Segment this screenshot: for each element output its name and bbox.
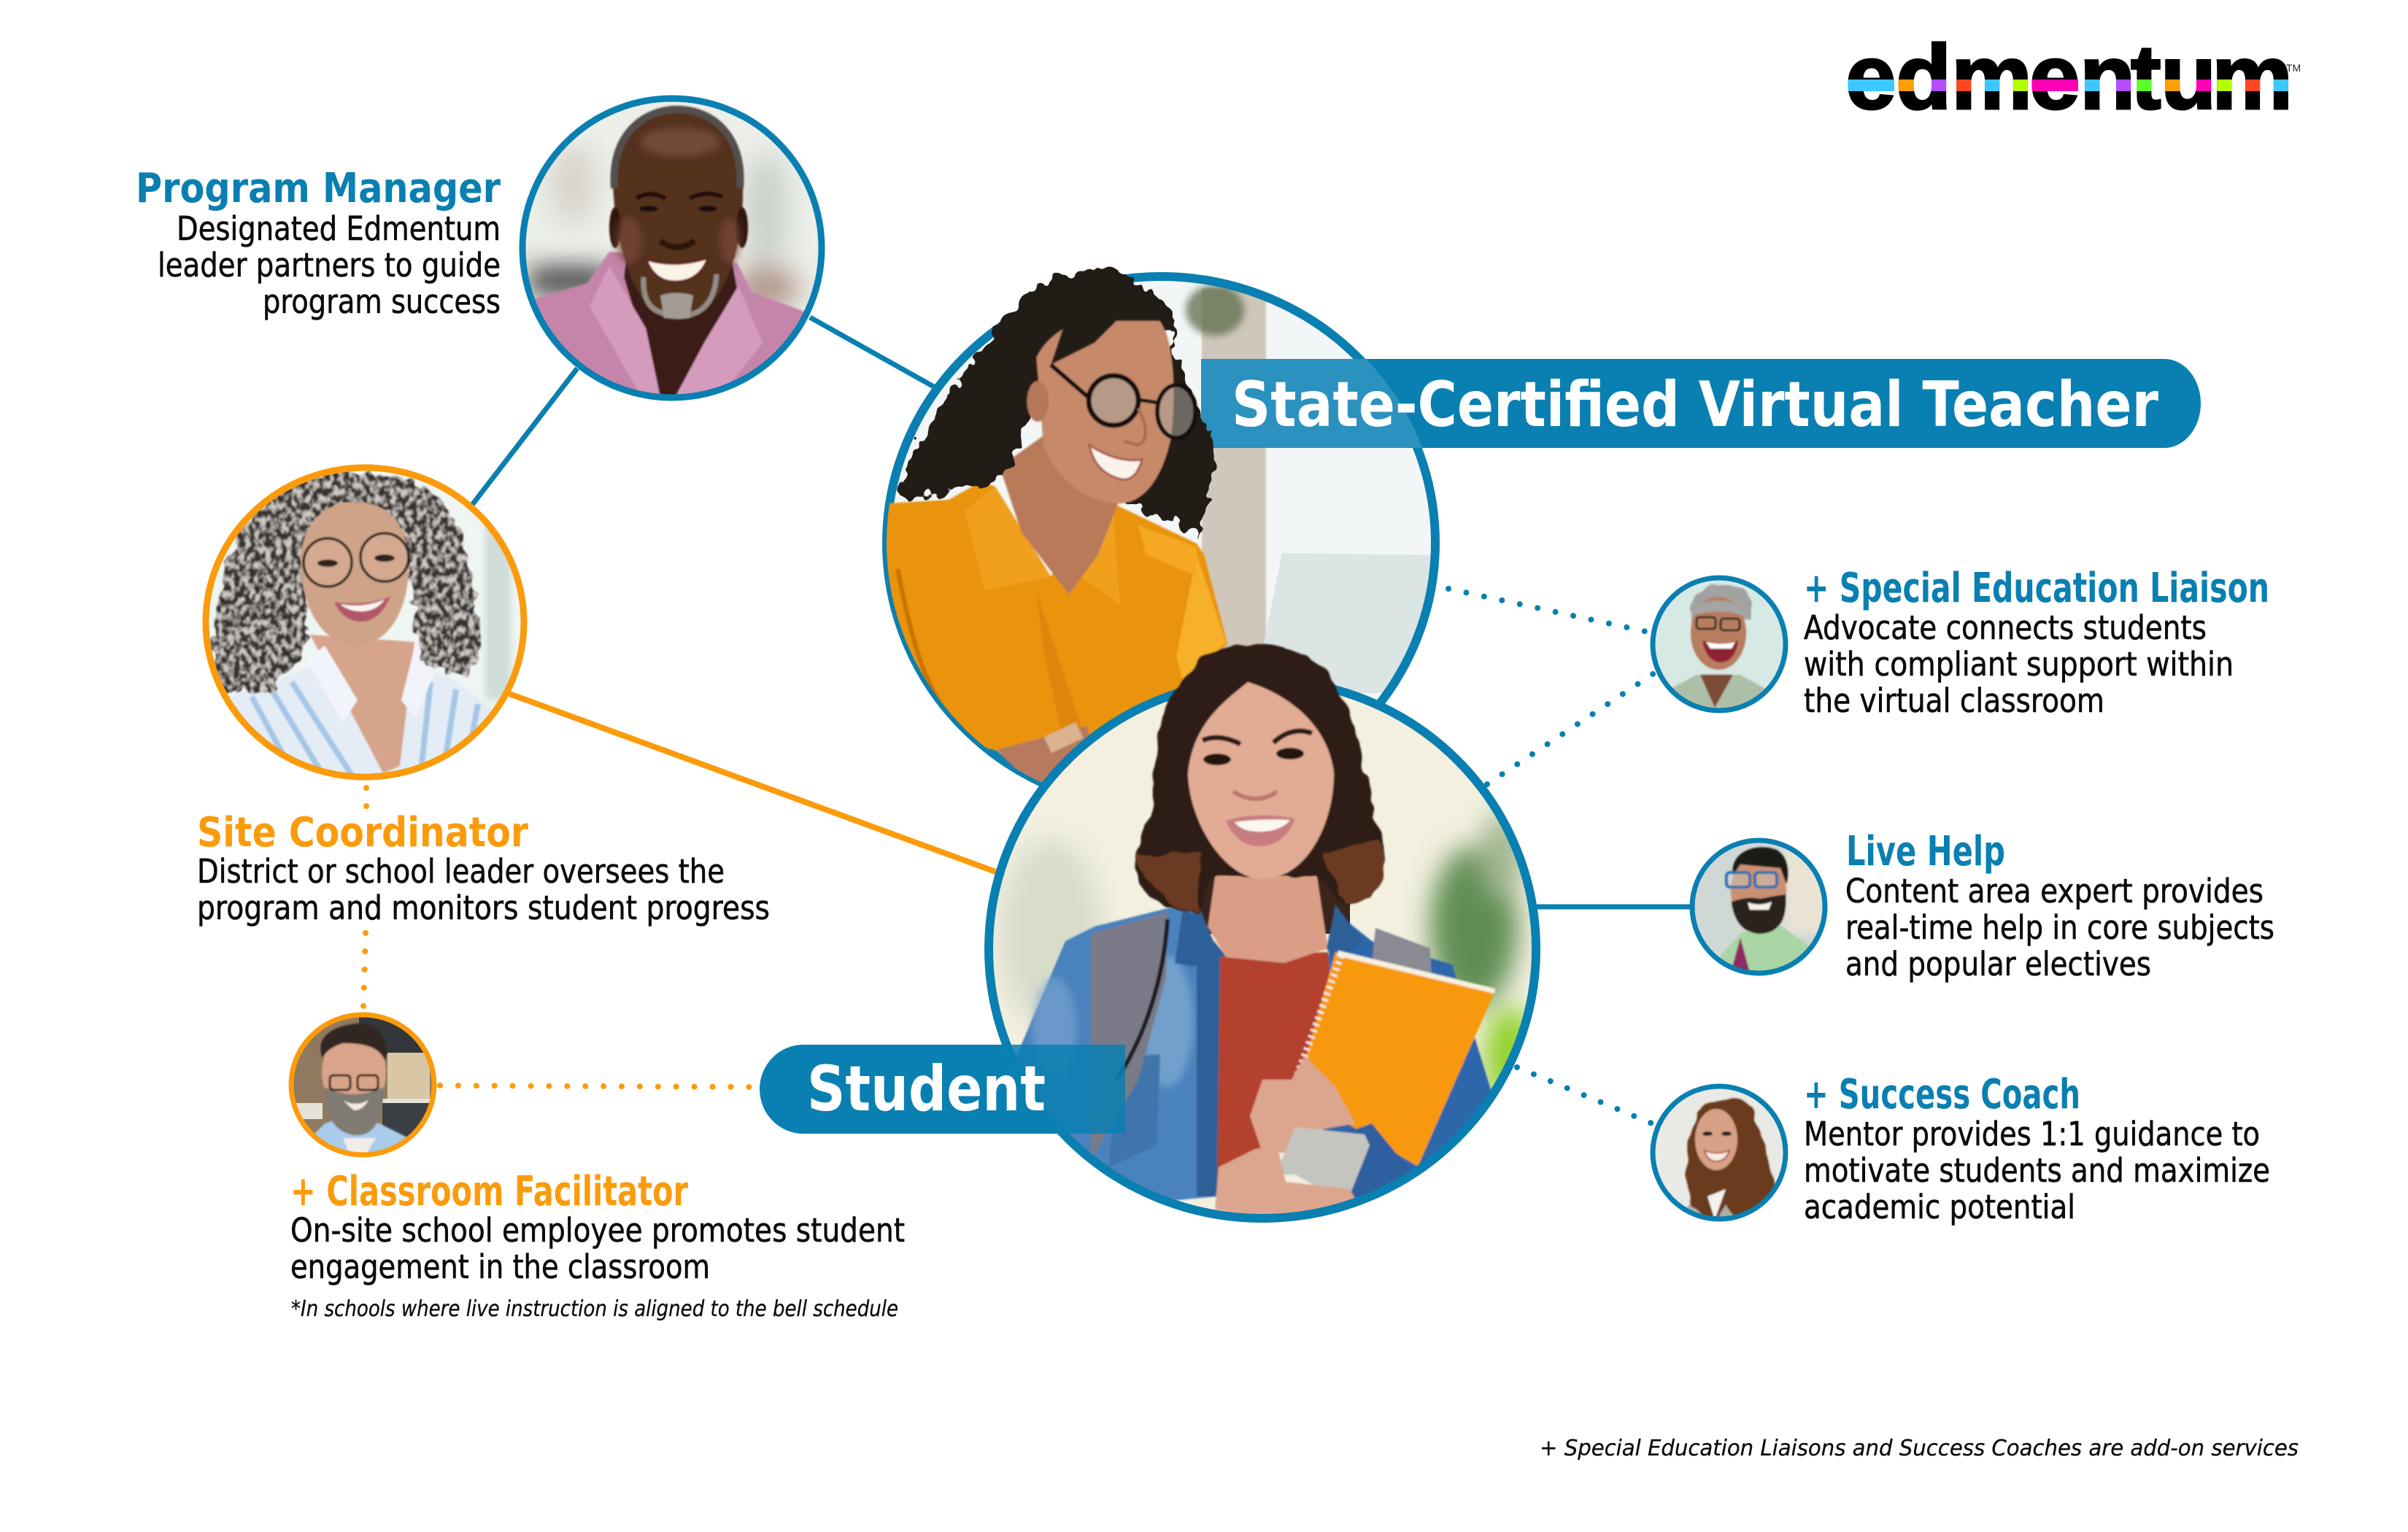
text: Classroom Facilitator: On-site school employee promotes student <box>290 1211 905 1250</box>
photo: site coordinator portrait <box>197 460 533 788</box>
text: Live Help <box>1845 828 2274 983</box>
text: Classroom Facilitator: *In schools where live instruction is aligned to the bell schedule <box>291 1296 898 1322</box>
text: Live Help: real-time help in core subjects <box>1845 908 2274 947</box>
banner label: State-Certified Virtual Teacher: State-Certified Virtual Teacher <box>1232 368 2159 441</box>
text: Special Education Liaison: the virtual classroom <box>1804 681 2104 720</box>
text: Program Manager <box>136 165 501 321</box>
connector: program manager to teacher <box>810 317 938 389</box>
text: Classroom Facilitator: engagement in the classroom <box>290 1247 710 1286</box>
photo: classroom facilitator portrait <box>285 1010 441 1160</box>
text: Success Coach <box>1804 1071 2270 1226</box>
photo: special education liaison portrait <box>1649 573 1791 719</box>
text: Site Coordinator: District or school leader oversees the <box>197 852 725 891</box>
photo: program manager portrait <box>511 88 832 409</box>
connector: dotted site coordinator to facilitator lower <box>363 933 366 1007</box>
text: Site Coordinator: Site Coordinator <box>197 809 528 856</box>
text: Program Manager: program success <box>263 282 501 321</box>
connector: dotted student to success coach <box>1517 1067 1652 1123</box>
text: Program Manager: Designated Edmentum <box>177 209 501 248</box>
text: Live Help: Live Help <box>1846 828 2005 875</box>
text: Program Manager: leader partners to guide <box>158 246 501 285</box>
connector: dotted facilitator to student <box>440 1086 752 1087</box>
connector: dotted teacher to special education liaison <box>1448 589 1651 632</box>
text: Live Help: and popular electives <box>1845 945 2151 983</box>
connector: site coordinator to student <box>509 694 1000 873</box>
banner: Student <box>760 1045 1125 1134</box>
connector: program manager to site coordinator <box>472 368 577 505</box>
logo: edmentum: TM <box>2286 62 2301 74</box>
text: Special Education Liaison <box>1804 565 2269 720</box>
text: Special Education Liaison: with compliant support within <box>1804 645 2234 684</box>
text: Success Coach: + Success Coach <box>1804 1071 2080 1118</box>
text: Live Help: Content area expert provides <box>1845 872 2264 910</box>
text: Classroom Facilitator <box>290 1168 905 1322</box>
photo: state-certified virtual teacher portrait background <box>882 272 1440 786</box>
logo: edmentum <box>1848 41 2300 111</box>
connector: dotted student to special education liaison <box>1487 673 1655 784</box>
connector: student to live help <box>1536 905 1693 909</box>
text: Success Coach: Mentor provides 1:1 guidance to <box>1804 1115 2260 1153</box>
logo: edmentum: edmentum <box>1845 27 2293 128</box>
text: Classroom Facilitator: + Classroom Facilitator <box>290 1168 688 1215</box>
connector: dotted site coordinator to facilitator upper <box>363 788 369 810</box>
photo: teacher person <box>876 269 1227 795</box>
banner shape: state-certified virtual teacher <box>1201 359 2201 448</box>
text: Site Coordinator: program and monitors student progress <box>197 889 770 927</box>
logo: edmentum: edmentum <box>1845 27 2293 128</box>
text: Special Education Liaison: Advocate connects students <box>1804 608 2207 647</box>
text: Program Manager: Program Manager <box>136 165 501 212</box>
text: Success Coach: academic potential <box>1804 1188 2075 1226</box>
banner: Student: Student <box>807 1053 1046 1126</box>
text: Site Coordinator <box>197 809 770 927</box>
footnote: add-on services: + Special Education Liaisons and Success Coaches are add-on services <box>1540 1436 2299 1461</box>
photo: live help portrait <box>1689 835 1832 978</box>
photo: student portrait <box>978 643 1547 1233</box>
text: Success Coach: motivate students and maximize <box>1804 1151 2270 1190</box>
photo: success coach portrait <box>1649 1081 1791 1223</box>
